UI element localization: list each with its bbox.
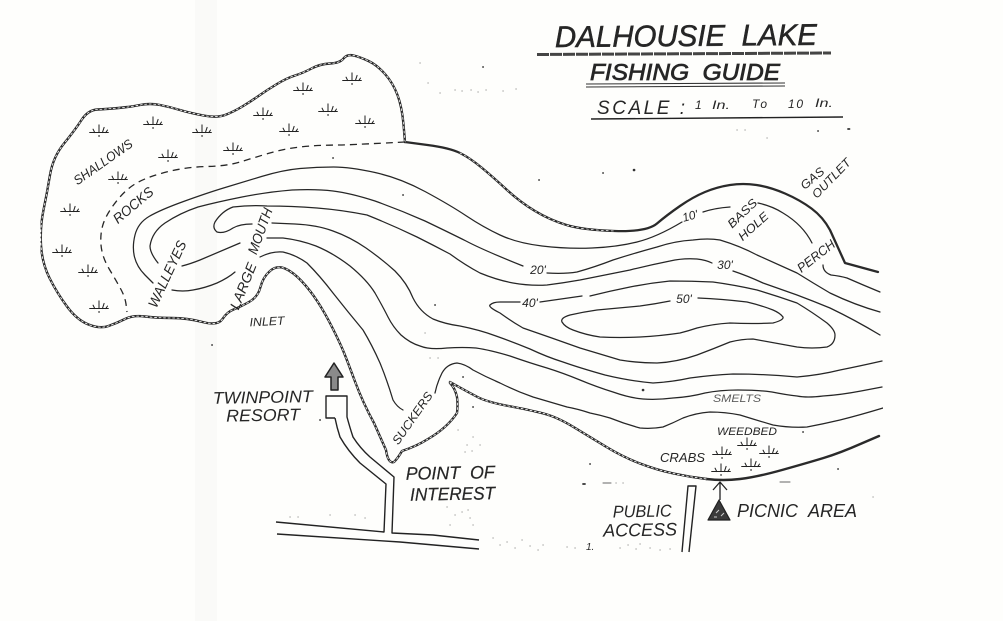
title: Dalhousie Lake: DALHOUSIE LAKE (555, 19, 818, 54)
scale: In. (712, 98, 730, 112)
icon: picnic tent and arrow (708, 482, 730, 520)
stray print mark: 1. (586, 542, 594, 553)
label: Point of Interest: INTEREST (410, 483, 497, 505)
depth labels: 10' (681, 207, 700, 225)
depth labels (522, 207, 734, 310)
depth labels: 40' (522, 296, 539, 310)
scale: 1 (695, 98, 702, 112)
region labels: OUTLET (809, 154, 855, 201)
label: Public Access: ACCESS (602, 519, 677, 541)
label: Twinpoint Resort (213, 387, 315, 426)
region labels: SHALLOWS (70, 136, 136, 188)
subtitle underline (586, 83, 785, 87)
region labels: WALLEYES (145, 237, 190, 310)
depth labels: 20' (529, 263, 547, 277)
region labels: SMELTS (713, 393, 762, 405)
region labels: HOLE (735, 208, 772, 244)
region labels: MOUTH (244, 205, 276, 256)
icons: weedbed weeds (712, 438, 778, 475)
region labels (70, 136, 855, 465)
scale: To (752, 97, 767, 111)
label: Twinpoint Resort: TWINPOINT (213, 387, 315, 408)
region labels: SUCKERS (389, 389, 436, 447)
scale: 10 (788, 97, 803, 111)
region labels: INLET (249, 314, 287, 329)
rocks boundary dashed line (101, 142, 405, 312)
roads (276, 396, 696, 552)
region labels: WEEDBED (717, 426, 777, 438)
region labels: BASS (725, 196, 760, 231)
icons: shallows weeds (53, 73, 374, 312)
label: Twinpoint Resort: RESORT (226, 405, 302, 426)
subtitle: Fishing Guide: FISHING GUIDE (590, 59, 781, 85)
region labels: PERCH (794, 236, 838, 275)
region labels: ROCKS (109, 183, 157, 227)
scale: In. (815, 96, 833, 110)
scale: SCALE : (597, 98, 685, 119)
depth contours (133, 167, 883, 428)
label: Point of Interest (406, 462, 497, 505)
label: Picnic Area: PICNIC AREA (737, 501, 857, 521)
depth labels: 30' (717, 258, 734, 272)
region labels: GAS (797, 164, 827, 192)
label: Point of Interest: POINT OF (406, 462, 496, 484)
shoreline (41, 55, 879, 480)
depth labels: 50' (676, 292, 693, 306)
scan specks (212, 63, 873, 550)
label: Public Access (602, 501, 677, 541)
scale (591, 96, 843, 119)
region labels: CRABS (660, 450, 705, 465)
region labels: LARGE (226, 260, 260, 312)
icon: resort arrow (325, 363, 343, 390)
label: Public Access: PUBLIC (613, 501, 673, 521)
title underline (537, 53, 831, 54)
